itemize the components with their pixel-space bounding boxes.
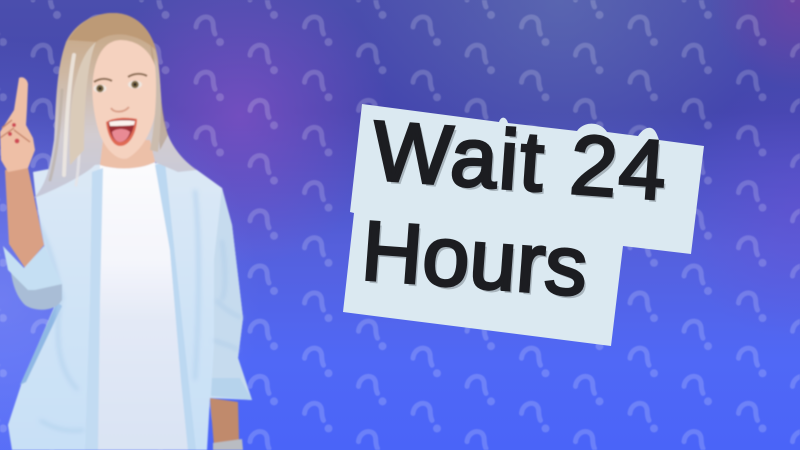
hair top shading [68,13,156,50]
t-shirt [97,162,188,450]
nose [111,107,129,112]
text: Hours: Hours [359,203,591,314]
shirt plackets [85,168,103,450]
face [92,40,158,159]
neck [100,140,155,168]
right sleeve [211,188,252,400]
shirt shadow wedge [20,302,62,385]
eyes [94,74,147,92]
text: Wait 24: Wait 24 [370,103,671,218]
rolled sleeve [10,262,62,310]
mouth [106,118,137,146]
hair front strands [70,42,96,165]
left arm [5,168,44,268]
shirt back and body [8,163,252,450]
hair back [34,13,197,198]
right forearm and watch [210,398,239,446]
shirt folds [30,190,199,431]
hand with pointing finger [0,77,35,172]
